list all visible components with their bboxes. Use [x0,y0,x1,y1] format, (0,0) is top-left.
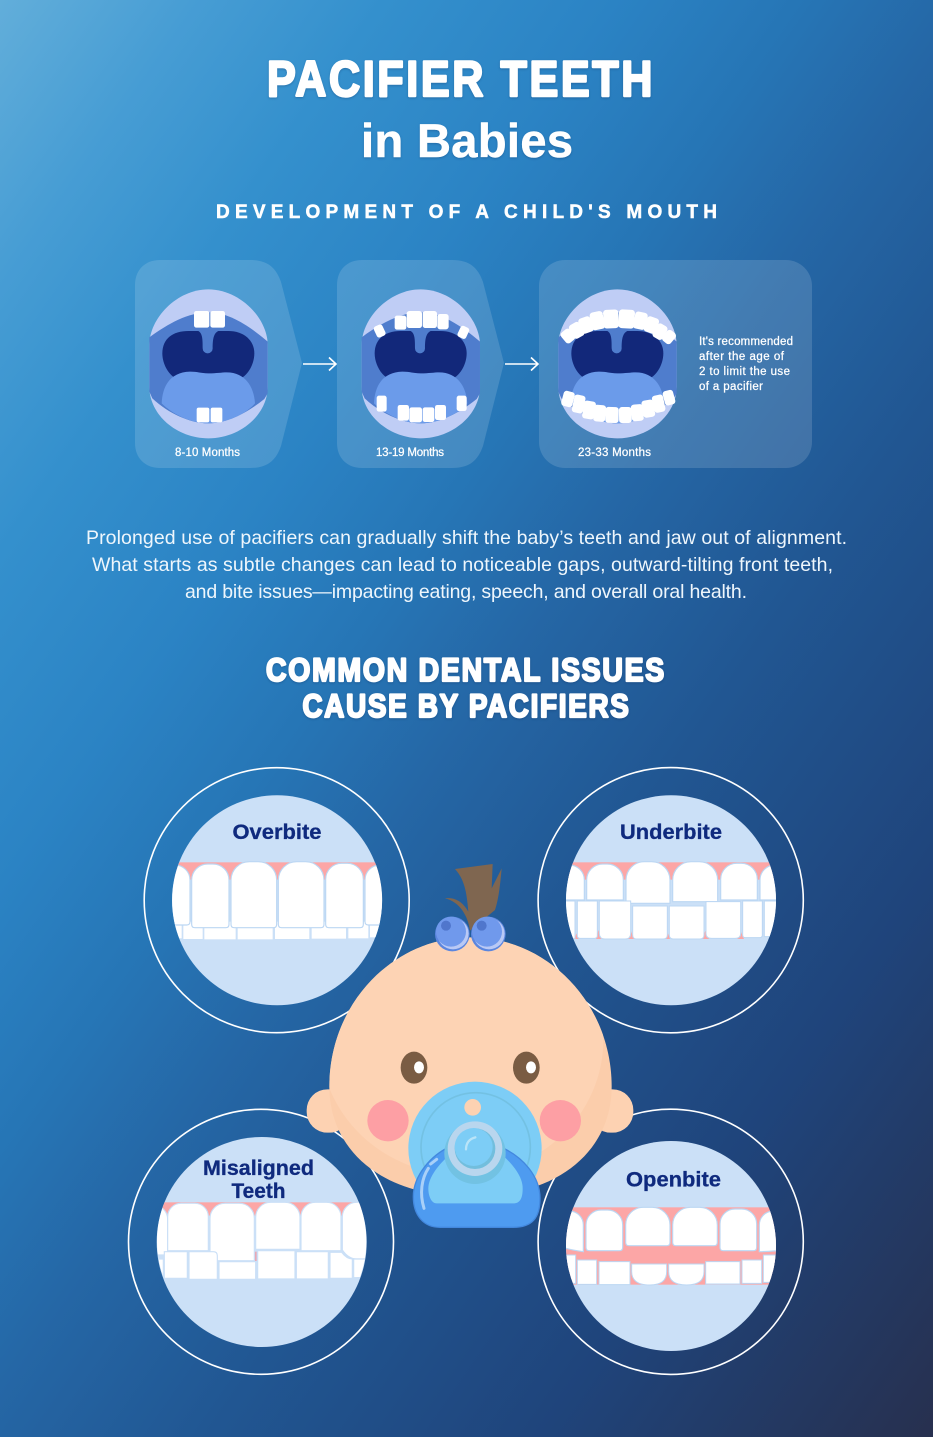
icon: mouth with few teeth [149,289,268,438]
arrow [505,358,538,370]
text: description paragraph [86,527,847,603]
icon: pacifier [408,1082,542,1227]
panel: 13-19 months [337,260,504,468]
illustration: misaligned teeth [157,1202,366,1279]
label: 8-10 months: 8-10 Months [175,447,240,459]
icon: mouth with more teeth [362,289,480,438]
heading: common dental issues: CAUSE BY PACIFIERS [302,688,630,724]
text: recommendation: after the age of [699,351,785,363]
label: misaligned teeth [203,1157,314,1203]
panel: underbite [538,768,803,1033]
label: underbite: Underbite [620,821,722,844]
icon: baby ears [307,1089,633,1133]
icon: mouth with full teeth [558,289,677,438]
title: PACIFIER TEETH [267,51,655,107]
label: misaligned teeth: Misaligned [203,1157,314,1180]
text: description paragraph: Prolonged use of pacifiers can gradually shift the baby’s teeth and jaw out of alignment. [86,527,847,549]
label: openbite: Openbite [626,1168,721,1192]
text: description paragraph: What starts as subtle changes can lead to noticeable gaps, outward-tilting front teeth, [92,554,833,576]
illustration: openbite teeth [566,1207,776,1286]
icon: hair tuft [445,864,502,931]
icon: hair ties [435,917,506,951]
panel: misaligned teeth [128,1109,394,1374]
text: recommendation: It's recommended [699,336,793,348]
label: 13-19 months: 13-19 Months [376,447,444,459]
panel: openbite [538,1109,803,1374]
text: description paragraph: and bite issues—impacting eating, speech, and overall oral health. [185,581,747,603]
title [267,51,655,167]
icon: baby head [329,937,612,1190]
text: recommendation [699,336,793,393]
heading: common dental issues: COMMON DENTAL ISSUES [266,652,666,688]
text: recommendation: 2 to limit the use [699,366,790,378]
icon: eyes [401,1052,540,1084]
illustration: overbite teeth [172,861,382,940]
icon: cheeks [367,1100,581,1141]
panel: 8-10 months [135,260,302,468]
title: in Babies [361,114,573,167]
panel: overbite [144,768,409,1033]
arrow [303,358,336,370]
label: overbite: Overbite [232,821,322,844]
label: misaligned teeth: Teeth [232,1180,286,1203]
text: recommendation: of a pacifier [699,381,763,393]
heading: development of a child's mouth: DEVELOPMENT OF A CHILD'S MOUTH [216,202,717,223]
illustration: baby with pacifier [307,864,633,1227]
illustration: underbite teeth [566,861,776,940]
label: 23-33 months: 23-33 Months [578,447,651,459]
heading: common dental issues [266,652,666,724]
panel: 23-33 months [539,260,812,468]
